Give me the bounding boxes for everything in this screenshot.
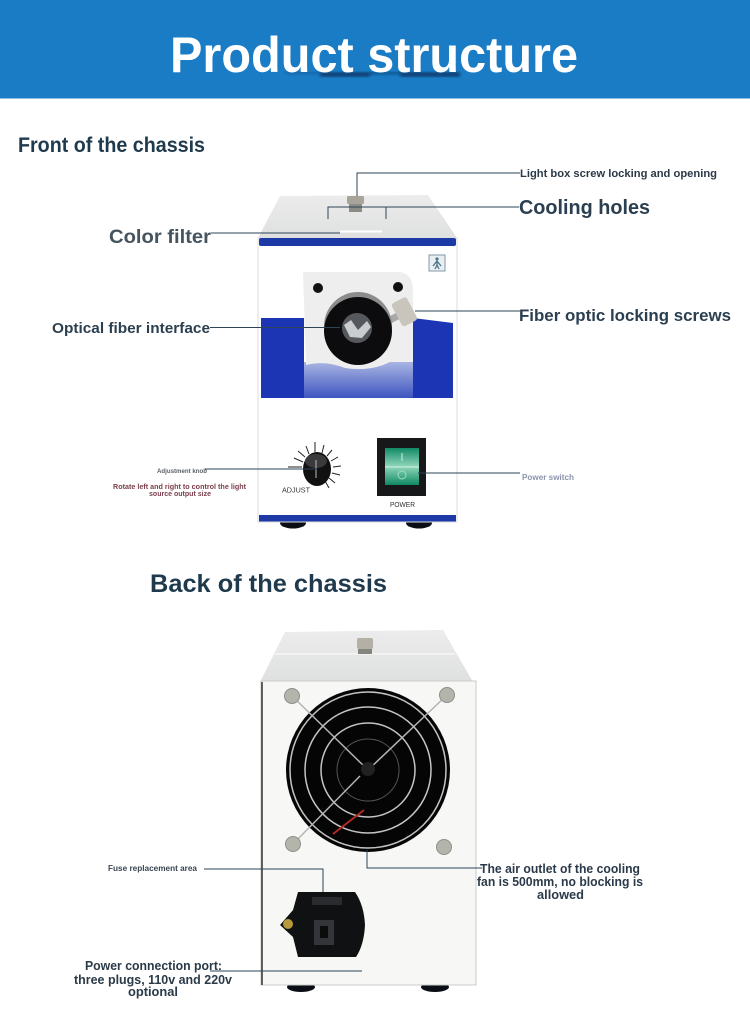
fan grille: [286, 688, 450, 852]
label: cooling fan outlet: allowed: [537, 888, 584, 902]
label: cooling fan outlet: The air outlet of the cooling: [480, 862, 640, 876]
label: power switch: Power switch: [522, 473, 574, 482]
front chassis photo: [258, 195, 457, 528]
label: adjustment description: source output size: [149, 491, 211, 498]
lid screw: [347, 196, 364, 212]
lens housing: [324, 292, 392, 365]
label: color filter: Color filter: [109, 227, 212, 248]
screw top right: [440, 688, 454, 702]
label: cooling fan outlet: [477, 862, 643, 902]
label: power connection port: three plugs, 110v and 220v: [74, 973, 232, 987]
lid fold line: [275, 653, 455, 655]
label: power connection port: optional: [128, 985, 178, 999]
foot right: [406, 518, 432, 528]
adjust dial: [282, 442, 341, 494]
label: light box screw: Light box screw locking and opening: [520, 168, 717, 180]
lens plate: [303, 272, 413, 369]
leader lines: front: [205, 173, 520, 473]
title: Product structure: [170, 27, 578, 83]
label: power connection port: [74, 959, 232, 999]
body symbol icon: [429, 255, 445, 271]
switch label: POWER: [390, 500, 416, 509]
leader lines: back: [204, 850, 482, 971]
front face: [258, 238, 457, 522]
label: cooling holes: Cooling holes: [519, 197, 650, 219]
back panel: [261, 681, 476, 985]
plate hole right: [393, 282, 403, 292]
heading: front of the chassis: Front of the chassis: [18, 134, 205, 157]
lid highlight: [340, 230, 382, 232]
plate hole left: [313, 283, 323, 293]
header banner: [0, 0, 750, 98]
power socket and fuse holder: [280, 892, 365, 957]
label: optical fiber interface: Optical fiber interface: [52, 321, 210, 337]
label: fiber optic locking screws: Fiber optic locking screws: [519, 307, 731, 325]
back foot right: [421, 982, 449, 992]
screw bottom left: [286, 836, 300, 852]
label: adjustment description: [113, 484, 247, 498]
screw top left: [284, 688, 300, 704]
dial label: ADJUST: [282, 486, 310, 494]
blue band right: [413, 318, 453, 398]
back lid: [260, 630, 473, 682]
top blue strip: [259, 238, 456, 246]
back foot left: [287, 982, 315, 992]
lower panel edge: [259, 515, 456, 522]
back chassis photo: [260, 630, 476, 992]
label: power connection port: Power connection port:: [85, 959, 222, 973]
foot left: [280, 518, 306, 528]
blue band left: [261, 318, 304, 398]
chassis lid: [258, 195, 457, 238]
label: adjustment knob: Adjustment knob: [157, 468, 207, 475]
lid screw: [357, 638, 373, 654]
thumb screw: [381, 296, 418, 332]
title shadow smudge: [285, 72, 460, 77]
label: fuse replacement area: Fuse replacement area: [108, 864, 198, 873]
screw bottom right: [436, 840, 452, 854]
heading: back of the chassis: Back of the chassis: [150, 570, 387, 598]
blue band reflection: [304, 362, 413, 398]
label: cooling fan outlet: fan is 500mm, no blocking is: [477, 875, 643, 889]
label: adjustment description: Rotate left and right to control the light: [113, 484, 247, 491]
power switch: [377, 438, 426, 509]
